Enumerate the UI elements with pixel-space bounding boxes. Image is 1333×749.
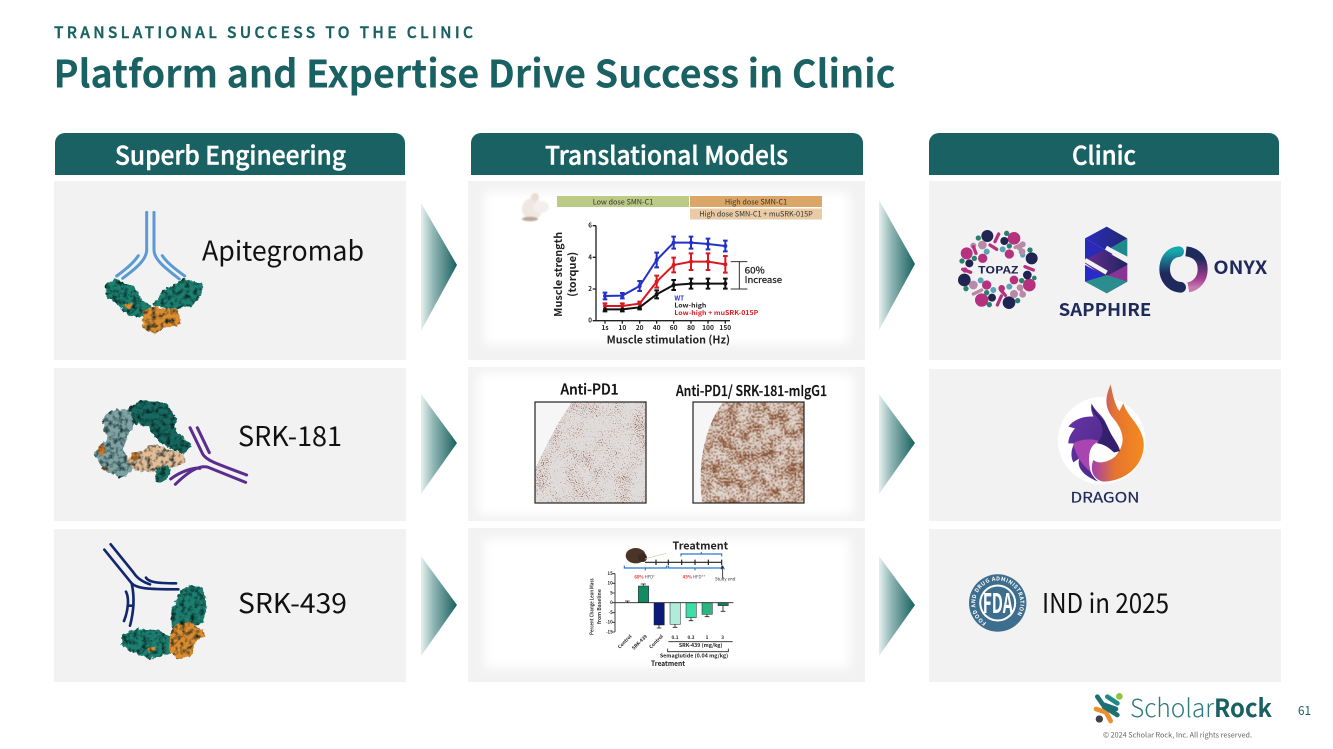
logo: DRAGON: DRAGON bbox=[1070, 487, 1139, 507]
line chart: muscle strength: 60 bbox=[670, 322, 678, 332]
bars bbox=[638, 586, 728, 625]
bar chart: lean mass: Treatment bbox=[672, 538, 729, 553]
column header: Superb Engineering: Superb Engineering bbox=[115, 136, 347, 172]
dose bars bbox=[557, 196, 822, 220]
bar chart: lean mass: Semaglutide (0.04 mg/kg) bbox=[660, 653, 728, 660]
logo: SAPPHIRE: SAPPHIRE bbox=[1059, 297, 1151, 322]
copyright: © 2024 Scholar Rock, Inc. All rights reserved. bbox=[1103, 730, 1252, 740]
line chart: muscle strength: 10 bbox=[618, 322, 626, 332]
series: low-high bbox=[603, 279, 728, 311]
legend bbox=[674, 294, 758, 317]
arrow: row 2 left bbox=[421, 394, 457, 494]
bar chart: lean mass: -15 bbox=[606, 629, 613, 635]
line chart: muscle strength bbox=[551, 221, 782, 348]
callout: 60% increase bbox=[731, 262, 782, 289]
bar chart: lean mass: 60% HFD* bbox=[634, 574, 655, 580]
dose bars: High dose SMN-C1 bbox=[725, 198, 787, 208]
label: Anti-PD1 / SRK-181-mIgG1: Anti-PD1/ SRK-181-mIgG1 bbox=[676, 380, 827, 401]
line chart: muscle strength: Muscle strength bbox=[551, 232, 566, 317]
column header: Clinic: Clinic bbox=[1072, 136, 1136, 172]
bar chart: lean mass: 45% HFD** bbox=[683, 574, 705, 580]
bar chart: lean mass: SRK-439 (mg/kg) bbox=[679, 642, 723, 649]
bar chart: lean mass: from Baseline bbox=[596, 589, 603, 624]
bar chart: lean mass: 10 bbox=[608, 581, 613, 587]
line chart: muscle strength: 4 bbox=[588, 252, 592, 261]
arrow: row 1 right bbox=[879, 200, 915, 330]
line chart: muscle strength: 6 bbox=[588, 221, 592, 230]
panel: lean mass model bbox=[468, 528, 865, 682]
arrow: row 3 left bbox=[421, 556, 457, 656]
legend: Low-high bbox=[674, 301, 706, 310]
line chart: muscle strength: 80 bbox=[687, 322, 695, 332]
logo: TOPAZ bbox=[958, 230, 1038, 309]
icon: brown mouse bbox=[626, 548, 667, 563]
column header: Translational Models: Translational Models bbox=[545, 136, 788, 172]
panel: SRK-439 bbox=[54, 529, 406, 682]
bar chart: lean mass: -5 bbox=[609, 610, 613, 616]
bar chart: lean mass: Treatment bbox=[651, 659, 685, 669]
bar chart: lean mass: 1 bbox=[706, 635, 709, 641]
eyebrow heading: TRANSLATIONAL SUCCESS TO THE CLINIC bbox=[54, 21, 473, 43]
line chart: muscle strength: 40 bbox=[653, 322, 661, 332]
logo: SAPPHIRE bbox=[1059, 227, 1151, 322]
bar chart: lean mass: 0.1 bbox=[671, 635, 679, 641]
label: IND in 2025: IND in 2025 bbox=[1042, 582, 1169, 621]
panel: tumor histology model bbox=[468, 367, 865, 521]
icon: SRK-181 antibody and molecule bbox=[97, 404, 247, 484]
arrow: row 3 right bbox=[879, 556, 915, 656]
logo: FDA seal: FOOD AND DRUG ADMINISTRATION bbox=[971, 576, 1024, 626]
column header: Clinic bbox=[929, 133, 1279, 175]
icon: white mouse bbox=[522, 193, 549, 221]
series: wild type bbox=[603, 237, 728, 299]
column header: Translational Models bbox=[471, 133, 863, 175]
logo: Scholar Rock bbox=[1096, 689, 1272, 725]
logo: DRAGON bbox=[1058, 384, 1145, 507]
callout: 60% increase: Increase bbox=[745, 273, 782, 286]
bar chart: lean mass: SRK-439 bbox=[631, 634, 649, 652]
bar chart: lean mass: Control bbox=[617, 633, 634, 650]
study timeline bbox=[624, 552, 724, 578]
logo: Scholar Rock: Scholar bbox=[1130, 689, 1215, 725]
legend: Low-high + muSRK-015P bbox=[674, 308, 758, 317]
arrow: row 2 right bbox=[879, 394, 915, 494]
panel: Apitegromab bbox=[54, 181, 406, 360]
icon: SRK-439 antibody and molecule bbox=[104, 544, 203, 656]
dose bars: High dose SMN-C1 + muSRK-015P bbox=[699, 210, 813, 220]
bar chart: lean mass: 0 bbox=[610, 600, 613, 606]
legend: WT bbox=[674, 294, 684, 303]
bar chart: lean mass: Study end bbox=[715, 575, 736, 582]
logo: TOPAZ: TOPAZ bbox=[978, 261, 1018, 276]
line chart: muscle strength: 0 bbox=[588, 316, 592, 325]
line chart: muscle strength: 1s bbox=[601, 322, 609, 332]
logo: Scholar Rock: Rock bbox=[1214, 689, 1272, 725]
bar chart: lean mass: Control bbox=[648, 633, 665, 650]
panel: clinic late-stage trials bbox=[929, 181, 1281, 360]
panel: SRK-181 bbox=[54, 368, 406, 521]
page number: 61 bbox=[1298, 700, 1311, 719]
line chart: muscle strength: (torque) bbox=[565, 252, 580, 297]
bar chart: lean mass: 3 bbox=[721, 635, 724, 641]
title: Platform and Expertise Drive Success in Clinic bbox=[54, 44, 896, 98]
bar chart: lean mass: 0.3 bbox=[687, 635, 695, 641]
line chart: muscle strength: Muscle stimulation (Hz) bbox=[607, 333, 730, 348]
line chart: muscle strength: 150 bbox=[719, 322, 731, 332]
line chart: muscle strength: 20 bbox=[636, 322, 644, 332]
arrow: row 1 left bbox=[421, 203, 457, 331]
panel: clinic IND bbox=[929, 529, 1281, 682]
panel: muscle strength model bbox=[468, 181, 865, 360]
label: SRK-439: SRK-439 bbox=[238, 582, 347, 621]
line chart: muscle strength: 2 bbox=[588, 284, 592, 293]
bar chart: lean mass: 5 bbox=[610, 590, 613, 596]
icon: Scholar Rock mark bbox=[1096, 693, 1123, 723]
bar chart: lean mass: Percent Change Lean Mass bbox=[588, 578, 595, 635]
image: Anti-PD1 tissue bbox=[535, 402, 646, 503]
line chart: muscle strength: 100 bbox=[702, 322, 714, 332]
dose bars: Low dose SMN-C1 bbox=[593, 198, 653, 208]
bar chart: lean mass: -10 bbox=[606, 620, 613, 626]
logo: ONYX bbox=[1165, 251, 1268, 287]
callout: 60% increase: 60% bbox=[745, 263, 765, 276]
logo: FDA seal: FDA bbox=[983, 582, 1013, 621]
label: SRK-181: SRK-181 bbox=[238, 415, 342, 454]
bar chart: lean mass: 15 bbox=[608, 571, 613, 577]
column header: Superb Engineering bbox=[55, 133, 405, 175]
image: Anti-PD1 plus SRK-181 tissue bbox=[693, 402, 804, 503]
panel: clinic DRAGON bbox=[929, 369, 1281, 521]
icon: Apitegromab antibody and molecule bbox=[109, 212, 199, 330]
label: Apitegromab: Apitegromab bbox=[202, 230, 364, 268]
bar chart: lean mass bbox=[588, 538, 736, 669]
label: Anti-PD1: Anti-PD1 bbox=[560, 378, 618, 400]
series: low-high plus muSRK-015P bbox=[603, 253, 728, 309]
logo: ONYX: ONYX bbox=[1213, 254, 1268, 280]
